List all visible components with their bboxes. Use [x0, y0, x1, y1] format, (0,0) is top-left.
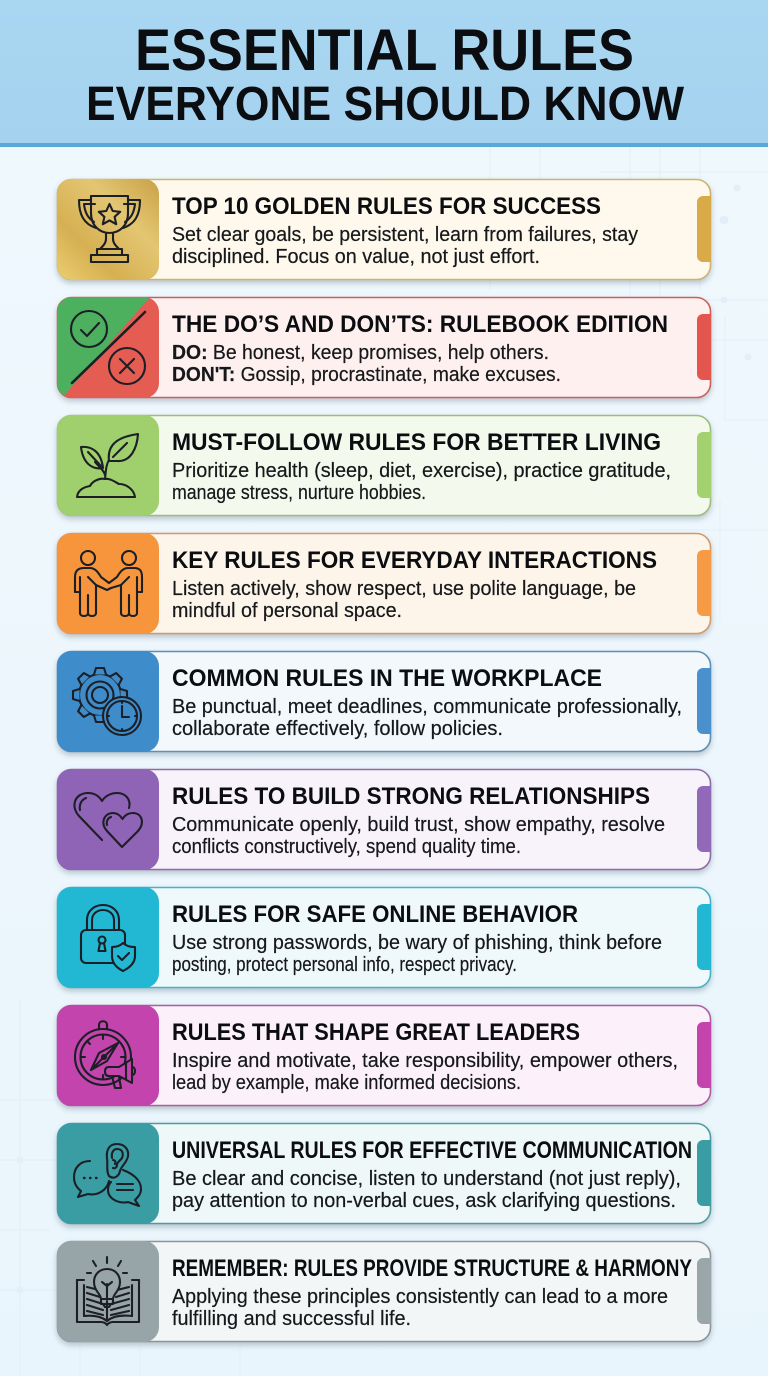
body text: DO: Be honest, keep promises, help others.	[172, 342, 549, 364]
body text: pay attention to non-verbal cues, ask clarifying questions.	[172, 1190, 676, 1212]
panel: everyday interactions	[57, 533, 711, 634]
icon: open book and light bulb	[77, 1257, 139, 1325]
body text: mindful of personal space.	[172, 600, 402, 622]
panel: workplace	[57, 651, 711, 752]
panel: do's and don'ts	[57, 297, 711, 398]
heading: COMMON RULES IN THE WORKPLACE	[172, 665, 602, 692]
body text	[172, 814, 665, 858]
body text: Prioritize health (sleep, diet, exercise), practice gratitude,	[172, 460, 671, 482]
body text: Set clear goals, be persistent, learn from failures, stay	[172, 224, 638, 246]
body text: Communicate openly, build trust, show empathy, resolve	[172, 814, 665, 836]
body text: collaborate effectively, follow policies.	[172, 718, 503, 740]
panel: relationships	[57, 769, 711, 870]
icon: two hearts	[74, 793, 142, 847]
body text: posting, protect personal info, respect privacy.	[172, 954, 517, 976]
heading: KEY RULES FOR EVERYDAY INTERACTIONS	[172, 547, 657, 574]
icon: sprout	[77, 434, 138, 497]
body text: Be punctual, meet deadlines, communicate professionally,	[172, 696, 682, 718]
body text	[172, 1050, 678, 1094]
icon: handshake	[75, 551, 142, 616]
heading: MUST-FOLLOW RULES FOR BETTER LIVING	[172, 429, 661, 456]
body text: Use strong passwords, be wary of phishing, think before	[172, 932, 662, 954]
heading: RULES THAT SHAPE GREAT LEADERS	[172, 1019, 580, 1046]
body text	[172, 460, 671, 504]
panel: leaders	[57, 1005, 711, 1106]
body text	[172, 342, 561, 386]
body text: DON'T: Gossip, procrastinate, make excuses.	[172, 364, 561, 386]
body text	[172, 224, 638, 268]
body text: lead by example, make informed decisions.	[172, 1072, 521, 1094]
body text: manage stress, nurture hobbies.	[172, 482, 426, 504]
body text	[172, 696, 682, 740]
heading: RULES TO BUILD STRONG RELATIONSHIPS	[172, 783, 650, 810]
body text	[172, 1168, 681, 1212]
icon: compass and megaphone	[75, 1021, 135, 1088]
body text: Applying these principles consistently can lead to a more	[172, 1286, 668, 1308]
body text: fulfilling and successful life.	[172, 1308, 411, 1330]
heading: TOP 10 GOLDEN RULES FOR SUCCESS	[172, 193, 601, 220]
icon: trophy	[79, 196, 140, 262]
header band	[0, 0, 768, 147]
panel: communication	[57, 1123, 711, 1224]
panel: golden rules	[57, 179, 711, 280]
body text: disciplined. Focus on value, not just effort.	[172, 246, 540, 268]
icon: gear and clock	[73, 668, 141, 735]
body text: Be clear and concise, listen to understand (not just reply),	[172, 1168, 681, 1190]
body text	[172, 1286, 668, 1330]
icon: padlock and shield	[81, 905, 135, 971]
panel: better living	[57, 415, 711, 516]
body text: Inspire and motivate, take responsibility, empower others,	[172, 1050, 678, 1072]
title line 2: EVERYONE SHOULD KNOW	[86, 78, 685, 131]
body text	[172, 578, 636, 622]
panel: remember	[57, 1241, 711, 1342]
icon: check and cross	[71, 311, 145, 384]
heading: THE DO’S AND DON’TS: RULEBOOK EDITION	[172, 311, 668, 338]
heading: RULES FOR SAFE ONLINE BEHAVIOR	[172, 901, 578, 928]
panel: online safety	[57, 887, 711, 988]
body text: Listen actively, show respect, use polite language, be	[172, 578, 636, 600]
icon: speech bubbles and ear	[74, 1144, 141, 1206]
body text: conflicts constructively, spend quality time.	[172, 836, 521, 858]
title line 1: ESSENTIAL RULES	[135, 18, 634, 83]
body text	[172, 932, 662, 976]
